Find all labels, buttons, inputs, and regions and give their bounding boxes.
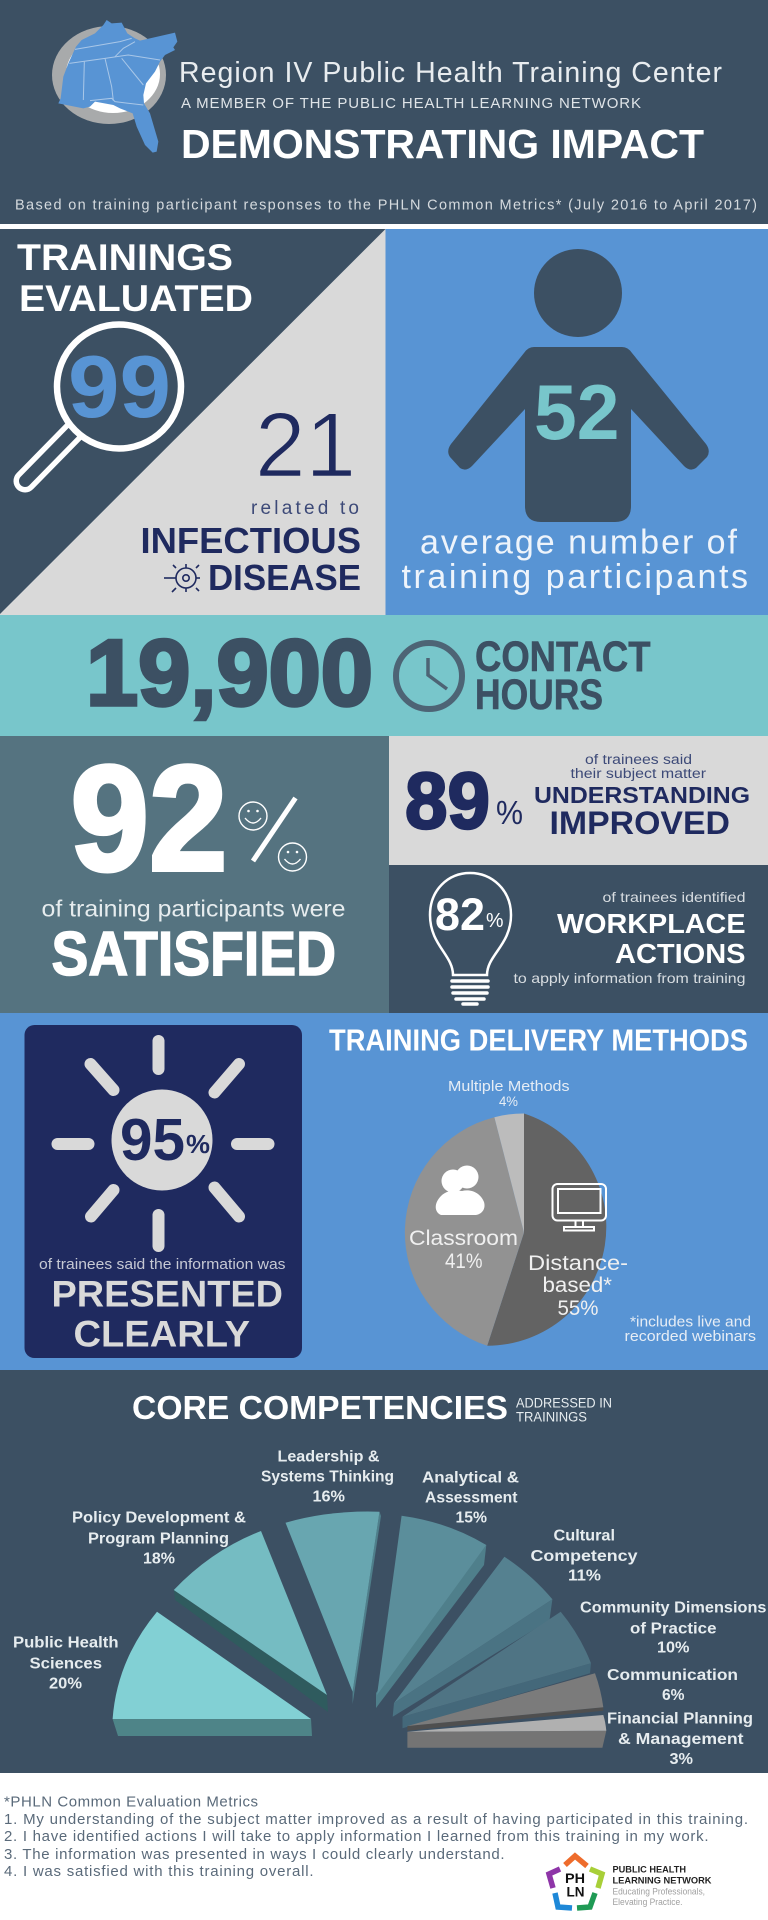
note: includes live and recorded webinars: *includes live and bbox=[630, 1314, 751, 1330]
label: cultural competency: 11% bbox=[568, 1568, 601, 1584]
stat: 92 percent with smiley icons: 92 bbox=[70, 734, 228, 902]
text block: PHLN common evaluation metrics footnote: 1. My understanding of the subject matter improved as a result of having participated in this training. bbox=[4, 1811, 748, 1828]
label: public health sciences: 20% bbox=[49, 1676, 82, 1692]
slice: communication 6% bbox=[407, 1673, 603, 1731]
title: center name: Region IV Public Health Training Center bbox=[179, 57, 722, 89]
label: analytical and assessment bbox=[422, 1470, 519, 1526]
heading: infectious disease bbox=[140, 520, 361, 598]
heading: trainings evaluated: EVALUATED bbox=[19, 278, 253, 319]
icon: PHLN pentagon: LN bbox=[566, 1884, 584, 1900]
heading: contact hours bbox=[475, 633, 650, 719]
slice: public health sciences 20% bbox=[113, 1612, 312, 1736]
label: financial planning and management: Financial Planning bbox=[607, 1710, 753, 1728]
label: community dimensions of practice: of Practice bbox=[630, 1620, 717, 1638]
text: average number of training participants: average number of bbox=[420, 524, 738, 562]
heading: understanding improved bbox=[534, 782, 750, 841]
label: community dimensions of practice: Community Dimensions bbox=[580, 1600, 767, 1616]
subheading: addressed in trainings: ADDRESSED IN bbox=[516, 1396, 612, 1410]
text: network name and tagline: PUBLIC HEALTH bbox=[612, 1864, 686, 1875]
slice: leadership 16% bbox=[286, 1511, 381, 1704]
label: leadership and systems thinking: Systems Thinking bbox=[261, 1468, 394, 1486]
panel: presented clearly bbox=[24, 1025, 302, 1358]
text: of training participants were: of training participants were bbox=[42, 896, 346, 922]
label: distance-based: based* bbox=[542, 1273, 613, 1297]
subheading: addressed in trainings bbox=[516, 1396, 612, 1424]
subheading: addressed in trainings: TRAININGS bbox=[516, 1410, 587, 1424]
label: policy development and program planning: Program Planning bbox=[88, 1530, 229, 1548]
stat: 19,900: 19,900 bbox=[86, 620, 373, 725]
label: distance-based: 55% bbox=[558, 1297, 598, 1320]
text: of trainees said bbox=[570, 752, 707, 781]
label: leadership and systems thinking: Leadership & bbox=[278, 1448, 380, 1466]
heading: infectious disease: DISEASE bbox=[208, 557, 361, 598]
icon: light bulb with 82 percent: 82 bbox=[435, 889, 485, 940]
icon: person with 52 bbox=[448, 249, 709, 522]
heading: infectious disease: INFECTIOUS bbox=[140, 520, 361, 561]
label: community dimensions of practice bbox=[580, 1600, 767, 1656]
panel: average participants bbox=[386, 229, 768, 615]
slice: policy development 18% bbox=[174, 1531, 328, 1712]
panel: header bbox=[0, 0, 768, 224]
panel: trainings evaluated bbox=[0, 229, 386, 615]
text: of trainees said: their subject matter bbox=[570, 766, 707, 781]
text: average number of training participants bbox=[402, 524, 748, 596]
note: includes live and recorded webinars: recorded webinars bbox=[624, 1329, 756, 1345]
text block: PHLN common evaluation metrics footnote: 4. I was satisfied with this training overall. bbox=[4, 1863, 314, 1880]
text: of trainees identified: of trainees identified bbox=[602, 889, 746, 905]
label: communication bbox=[607, 1667, 738, 1704]
panel: training delivery methods bbox=[329, 1022, 756, 1346]
heading: contact hours: CONTACT bbox=[475, 633, 650, 681]
icon: classroom people bbox=[436, 1166, 485, 1215]
label: public health sciences: Public Health bbox=[13, 1634, 118, 1652]
heading: understanding improved: UNDERSTANDING bbox=[534, 782, 750, 808]
label: multiple methods bbox=[448, 1078, 570, 1109]
text: of trainees said: of trainees said bbox=[585, 752, 692, 767]
label: classroom: 41% bbox=[445, 1250, 482, 1273]
text block: PHLN common evaluation metrics footnote: 2. I have identified actions I will take to apply information I learned from this training in my work. bbox=[4, 1828, 708, 1845]
label: classroom: Classroom bbox=[409, 1226, 518, 1250]
icon: clock bbox=[396, 643, 462, 709]
label: policy development and program planning bbox=[72, 1510, 246, 1568]
text block: PHLN common evaluation metrics footnote: *PHLN Common Evaluation Metrics bbox=[4, 1794, 258, 1810]
icon: sun with 95 percent: % bbox=[186, 1129, 210, 1159]
heading: presented clearly bbox=[52, 1274, 283, 1354]
slice: financial planning 3% bbox=[407, 1715, 606, 1748]
icon: computer monitor bbox=[552, 1184, 606, 1230]
label: communication: Communication bbox=[607, 1667, 738, 1684]
label: multiple methods: 4% bbox=[499, 1093, 518, 1109]
slice: analytical 15% bbox=[376, 1516, 486, 1708]
label: policy development and program planning: 18% bbox=[143, 1550, 175, 1568]
panel: core competencies bbox=[0, 1370, 768, 1773]
text: to apply information from training: to apply information from training bbox=[514, 970, 746, 986]
icon: magnifying glass with 99 bbox=[25, 324, 181, 481]
panel: workplace actions bbox=[389, 865, 768, 1013]
text: related to: related to bbox=[251, 498, 359, 519]
icon: light bulb with 82 percent: % bbox=[486, 910, 504, 932]
icon: sun with 95 percent: 95 bbox=[120, 1107, 185, 1173]
heading: understanding improved: IMPROVED bbox=[550, 805, 730, 841]
slice: community dimensions 10% bbox=[402, 1612, 591, 1728]
label: cultural competency: Cultural bbox=[554, 1528, 615, 1544]
label: public health sciences bbox=[13, 1634, 118, 1692]
heading: workplace actions bbox=[557, 908, 746, 969]
text: network name and tagline: Elevating Practice. bbox=[612, 1897, 682, 1907]
heading: workplace actions: ACTIONS bbox=[615, 938, 746, 969]
heading: workplace actions: WORKPLACE bbox=[557, 908, 746, 939]
icon: virus bbox=[164, 564, 200, 592]
label: financial planning and management bbox=[607, 1710, 753, 1768]
heading: trainings evaluated bbox=[17, 237, 253, 319]
chart: exploded semi-circular pie of competencies bbox=[113, 1511, 606, 1748]
text: average number of training participants: training participants bbox=[402, 558, 748, 596]
label: multiple methods: Multiple Methods bbox=[448, 1078, 570, 1095]
icon: PHLN pentagon: PH bbox=[565, 1870, 585, 1886]
label: cultural competency bbox=[530, 1528, 638, 1584]
icon: sun with 95 percent bbox=[58, 1041, 268, 1246]
label: distance-based: Distance- bbox=[528, 1251, 628, 1275]
label: communication: 6% bbox=[662, 1687, 684, 1704]
icon: person with 52: 52 bbox=[534, 368, 620, 456]
heading: presented clearly: PRESENTED bbox=[52, 1274, 283, 1314]
logo: public health learning network bbox=[549, 1856, 712, 1908]
text block: PHLN common evaluation metrics footnote: 3. The information was presented in ways I could clearly understand. bbox=[4, 1846, 504, 1863]
label: policy development and program planning: Policy Development & bbox=[72, 1510, 246, 1526]
icon: light bulb with 82 percent bbox=[430, 873, 511, 1004]
icon: PHLN pentagon bbox=[549, 1856, 602, 1908]
panel: delivery section background bbox=[0, 1013, 768, 1370]
label: financial planning and management: & Management bbox=[618, 1731, 744, 1748]
text: data basis: Based on training participant responses to the PHLN Common Metrics* (July 2016 to April 2017) bbox=[15, 198, 757, 214]
label: distance-based bbox=[528, 1251, 628, 1320]
label: community dimensions of practice: 10% bbox=[657, 1640, 690, 1656]
label: leadership and systems thinking: 16% bbox=[312, 1488, 345, 1506]
label: financial planning and management: 3% bbox=[670, 1751, 693, 1768]
text: of trainees said the information was: of trainees said the information was bbox=[39, 1257, 286, 1273]
slice: cultural competency 11% bbox=[393, 1557, 552, 1717]
pie chart: delivery methods bbox=[405, 1114, 606, 1346]
label: cultural competency: Competency bbox=[530, 1548, 638, 1565]
icon: magnifying glass with 99: 99 bbox=[68, 337, 171, 436]
note: includes live and recorded webinars bbox=[624, 1314, 756, 1345]
label: public health sciences: Sciences bbox=[30, 1656, 102, 1672]
text: network name and tagline bbox=[612, 1864, 712, 1907]
heading: satisfied: SATISFIED bbox=[52, 920, 336, 989]
panel: contact hours bbox=[0, 615, 768, 736]
heading: contact hours: HOURS bbox=[475, 671, 603, 719]
text: network name and tagline: LEARNING NETWORK bbox=[612, 1876, 712, 1886]
stat: 89 percent: 89 bbox=[405, 756, 490, 845]
label: analytical and assessment: Analytical & bbox=[422, 1470, 519, 1486]
stat: 21: 21 bbox=[255, 394, 356, 496]
label: leadership and systems thinking bbox=[261, 1448, 394, 1506]
heading: trainings evaluated: TRAININGS bbox=[17, 237, 233, 278]
panel: satisfied bbox=[0, 734, 389, 1013]
stat: 89 percent: % bbox=[496, 794, 523, 831]
label: classroom bbox=[409, 1226, 518, 1273]
heading: core competencies: CORE COMPETENCIES bbox=[132, 1389, 508, 1426]
panel: understanding improved bbox=[389, 736, 768, 865]
subtitle: network membership: A MEMBER OF THE PUBLIC HEALTH LEARNING NETWORK bbox=[181, 95, 641, 112]
text block: PHLN common evaluation metrics footnote bbox=[4, 1794, 748, 1880]
label: analytical and assessment: Assessment bbox=[425, 1490, 518, 1506]
label: analytical and assessment: 15% bbox=[456, 1510, 487, 1526]
icon: Region IV map logo bbox=[52, 20, 177, 153]
heading: presented clearly: CLEARLY bbox=[74, 1314, 250, 1354]
title: demonstrating impact: DEMONSTRATING IMPACT bbox=[181, 121, 704, 167]
text: network name and tagline: Educating Professionals, bbox=[612, 1886, 705, 1896]
